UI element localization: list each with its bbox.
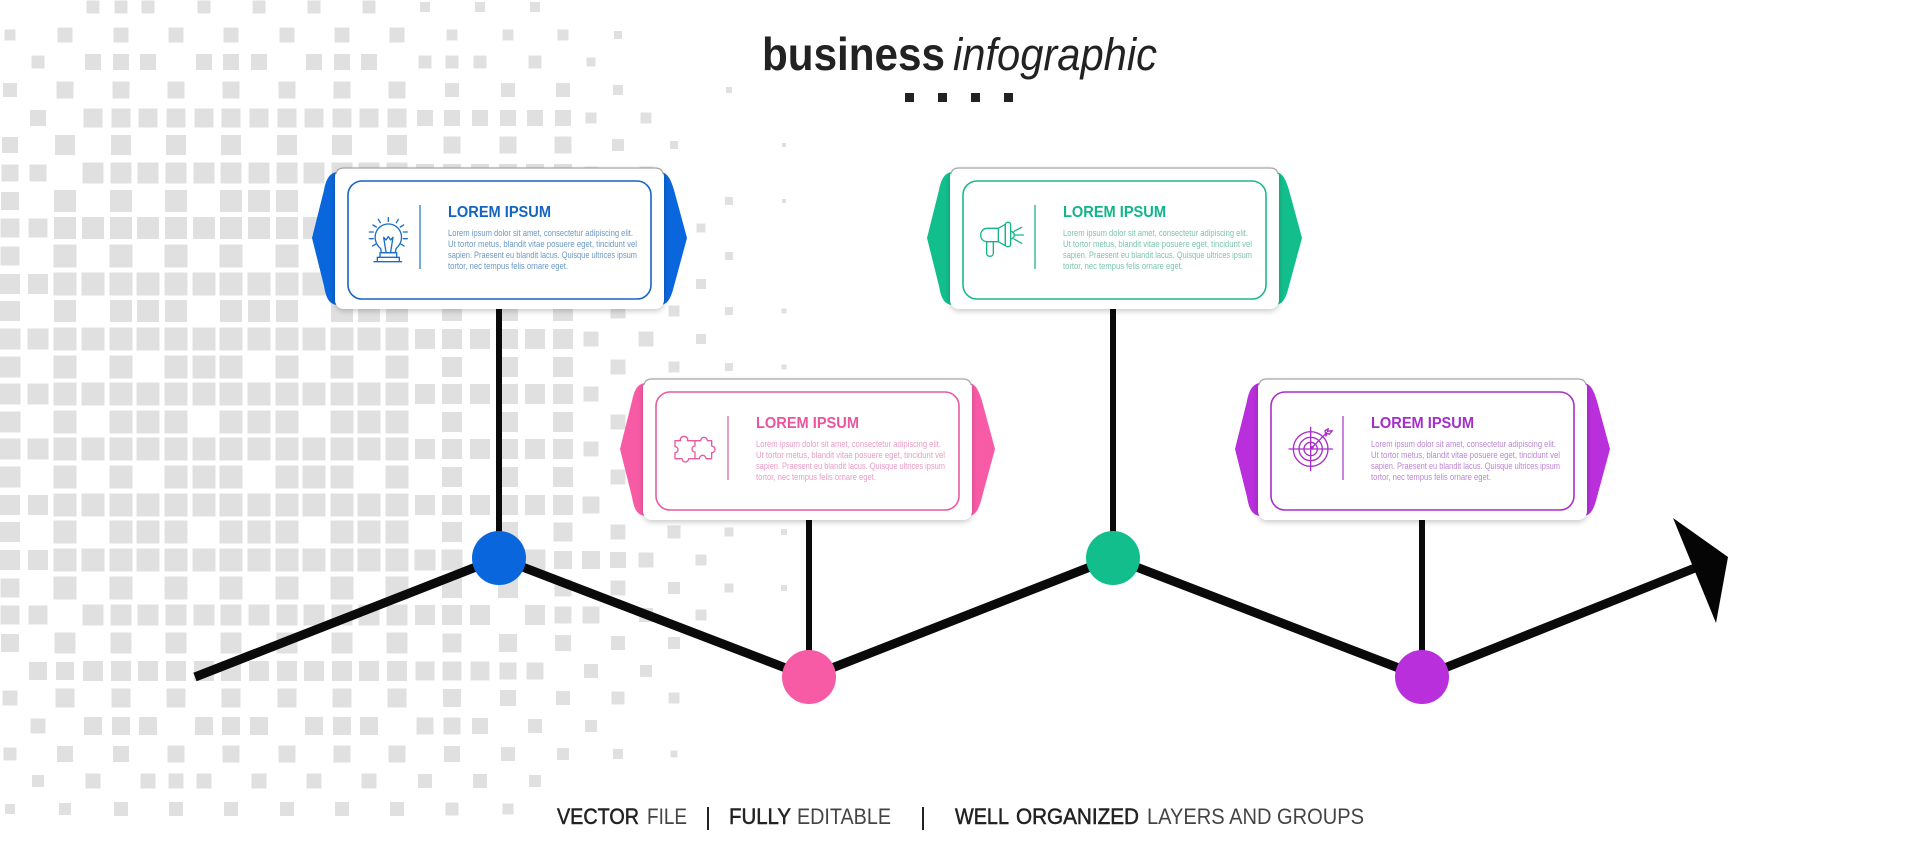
footer text [557,804,1364,830]
title dots [905,93,1013,102]
node: blue [472,531,526,585]
body text: Lorem ipsum dolor sit amet, consectetur adipiscing elit. [1371,439,1556,449]
timeline arrow [195,518,1728,677]
body text: Ut tortor metus, blandit vitae posuere eget, tincidunt vel [756,450,945,460]
body text: sapien. Praesent eu blandit lacus. Quisque ultrices ipsum [1371,461,1560,471]
body text [756,439,945,482]
heading: LOREM IPSUM [448,204,551,221]
footer text: WELL [955,804,1009,829]
heading: LOREM IPSUM [756,415,859,432]
panel: pink card [620,379,995,520]
heading: LOREM IPSUM [1371,415,1474,432]
body text: Ut tortor metus, blandit vitae posuere eget, tincidunt vel [1371,450,1560,460]
title: infographic [953,29,1157,80]
body text: Lorem ipsum dolor sit amet, consectetur adipiscing elit. [448,228,633,238]
footer text: FILE [647,804,687,829]
body text: tortor, nec tempus felis ornare eget. [1371,472,1491,482]
node: green [1086,531,1140,585]
title [762,28,1157,80]
body text: sapien. Praesent eu blandit lacus. Quisque ultrices ipsum [448,250,637,260]
body text: Ut tortor metus, blandit vitae posuere eget, tincidunt vel [1063,239,1252,249]
icon: target [1289,427,1332,471]
body text: tortor, nec tempus felis ornare eget. [448,261,568,271]
divider [419,205,421,269]
body text [448,228,637,271]
heading: LOREM IPSUM [1063,204,1166,221]
node: pink [782,650,836,704]
footer text: LAYERS AND GROUPS [1147,804,1364,829]
footer text: ORGANIZED [1016,804,1139,829]
body text: sapien. Praesent eu blandit lacus. Quisque ultrices ipsum [756,461,945,471]
icon: megaphone [981,222,1023,256]
icon: puzzle [675,436,715,462]
body text [1371,439,1560,482]
footer text: EDITABLE [797,804,891,829]
panel: green card [927,168,1302,309]
divider [727,416,729,480]
footer text: VECTOR [557,804,639,829]
body text: Ut tortor metus, blandit vitae posuere eget, tincidunt vel [448,239,637,249]
body text: tortor, nec tempus felis ornare eget. [1063,261,1183,271]
divider [1034,205,1036,269]
body text: Lorem ipsum dolor sit amet, consectetur adipiscing elit. [1063,228,1248,238]
panel: blue card [312,168,687,309]
body text: tortor, nec tempus felis ornare eget. [756,472,876,482]
body text [1063,228,1252,271]
body text: sapien. Praesent eu blandit lacus. Quisque ultrices ipsum [1063,250,1252,260]
panel: purple card [1235,379,1610,520]
divider [1342,416,1344,480]
body text: Lorem ipsum dolor sit amet, consectetur adipiscing elit. [756,439,941,449]
icon: light bulb [369,218,407,262]
title: business [762,28,945,80]
node: purple [1395,650,1449,704]
footer text: FULLY [729,804,791,829]
stems [499,305,1422,677]
